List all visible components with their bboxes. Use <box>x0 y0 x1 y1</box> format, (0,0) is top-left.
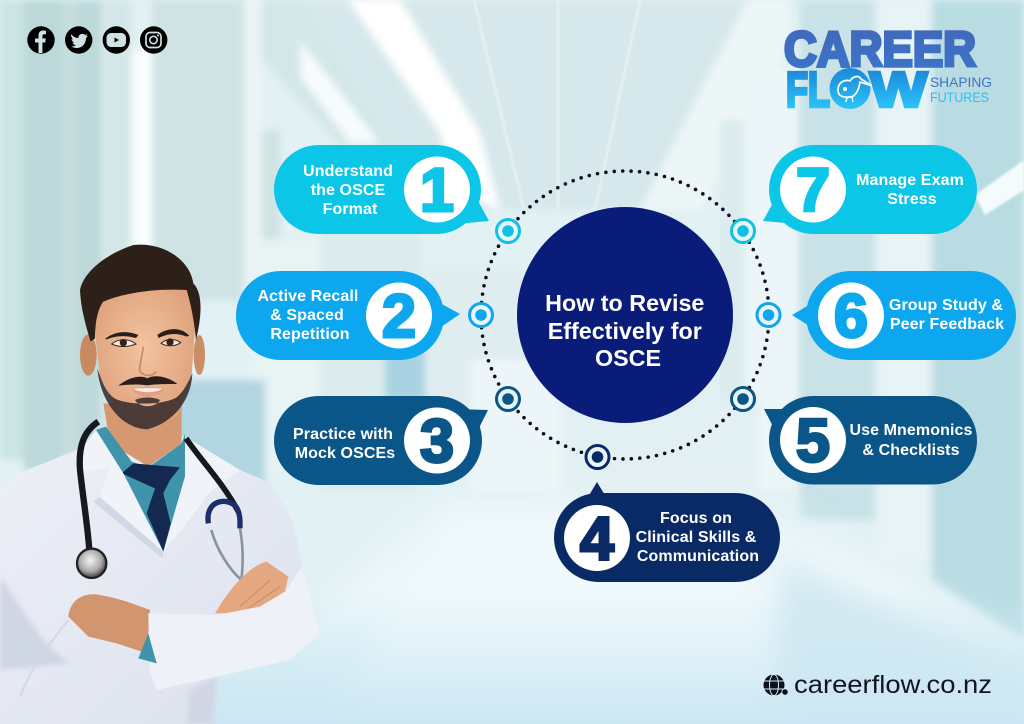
step 7 bubble: Stress <box>887 191 937 208</box>
step 6 bubble: Group Study & <box>889 297 1003 314</box>
central title: How to Revise <box>545 290 704 316</box>
step 4 bubble: Focus on <box>660 510 732 527</box>
node 6 <box>757 304 780 326</box>
icon: youtube <box>103 26 130 54</box>
step 2 bubble: Active Recall <box>258 288 358 305</box>
coat <box>0 430 320 724</box>
step 3 bubble: 3 <box>420 407 454 475</box>
central circle <box>517 207 733 423</box>
step 6 bubble: Peer Feedback <box>890 316 1004 333</box>
logo wordmark: FL: FL <box>786 64 830 118</box>
step 4 bubble <box>554 482 780 582</box>
step 2 bubble <box>236 271 460 360</box>
stethoscope <box>77 422 243 580</box>
dotted ring <box>481 171 769 459</box>
mustache and smile <box>118 376 177 396</box>
icon: globe <box>764 674 788 696</box>
icon: facebook <box>27 26 55 54</box>
step 7 bubble: Manage Exam <box>856 172 964 189</box>
eyes and eyebrows <box>105 329 189 375</box>
shirt <box>96 427 185 552</box>
node 5 <box>732 388 754 410</box>
step 1 bubble <box>274 145 489 234</box>
central title: OSCE <box>595 345 661 371</box>
step 1 bubble: Understand <box>303 163 393 180</box>
face <box>93 283 195 429</box>
head <box>80 245 205 429</box>
neck <box>103 403 182 467</box>
node 1 <box>496 220 520 242</box>
node 7 <box>732 220 754 242</box>
step 2 bubble: Repetition <box>270 326 350 343</box>
step 6 bubble: 6 <box>834 282 868 350</box>
logo: Career Flow <box>784 23 992 118</box>
step 3 bubble: Practice with <box>293 426 393 443</box>
step 1 bubble: the OSCE <box>311 182 386 199</box>
ring nodes <box>470 220 780 468</box>
logo tagline <box>930 75 992 105</box>
icon: instagram <box>140 26 167 54</box>
step 1 bubble: 1 <box>420 156 454 224</box>
step 4 bubble: 4 <box>580 504 614 572</box>
step 7 bubble <box>763 145 977 234</box>
doctor photo illustration <box>0 245 320 724</box>
step 1 bubble: Format <box>323 201 378 218</box>
central title: Effectively for <box>548 318 702 344</box>
logo tagline: FUTURES <box>930 90 989 105</box>
hair <box>80 245 201 342</box>
node 4 <box>586 446 609 468</box>
crossed arms <box>68 562 320 690</box>
step 2 bubble: & Spaced <box>270 307 344 324</box>
logo wordmark: W: W <box>870 64 928 118</box>
step 4 bubble: Communication <box>637 548 759 565</box>
logo tagline: SHAPING <box>930 75 992 90</box>
step 7 bubble: 7 <box>796 156 830 224</box>
step 5 bubble: Use Mnemonics <box>849 422 973 439</box>
step 5 bubble: & Checklists <box>862 442 960 459</box>
step 3 bubble <box>274 396 488 485</box>
icon: twitter <box>65 26 92 54</box>
step 2 bubble: 2 <box>382 282 416 350</box>
lapels <box>74 430 240 552</box>
website footer <box>764 671 992 699</box>
ears <box>80 334 97 376</box>
step 4 bubble: Clinical Skills & <box>636 529 757 546</box>
step 6 bubble <box>792 271 1016 360</box>
website url: careerflow.co.nz <box>794 671 992 699</box>
step 5 bubble <box>764 396 977 484</box>
beard <box>97 368 192 429</box>
node 3 <box>496 388 520 410</box>
icon: kiwi in O <box>830 68 872 109</box>
tie <box>122 463 180 552</box>
step 3 bubble: Mock OSCEs <box>295 445 395 462</box>
logo wordmark: CAREER: CAREER <box>784 23 976 77</box>
social icons <box>27 26 167 54</box>
step 5 bubble: 5 <box>796 406 830 474</box>
node 2 <box>470 304 492 326</box>
